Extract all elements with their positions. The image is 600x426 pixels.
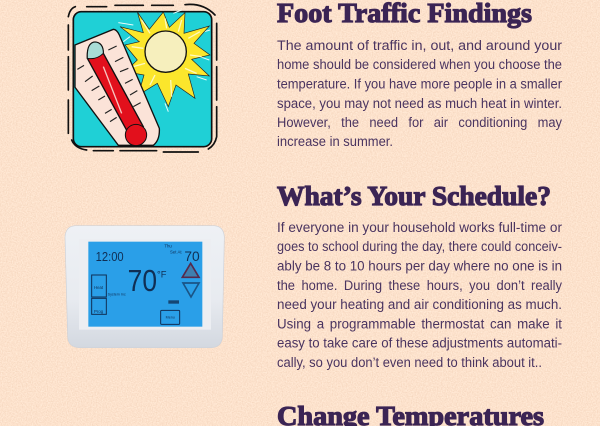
thermostat screen: Prog <box>94 309 104 314</box>
text block: schedule: If everyone in your household works full-time or <box>277 220 562 235</box>
text block: foot traffic: space, you may not need as much heat in winter. <box>277 96 562 111</box>
thermostat screen: Heat <box>94 285 104 290</box>
text block: schedule: goes to school during the day, there could conceiv- <box>277 239 562 254</box>
text block: schedule: ably be 8 to 10 hours per day where no one is in <box>277 258 562 274</box>
icon: programmable thermostat <box>65 226 224 348</box>
thermostat screen: 12:00 <box>96 249 124 264</box>
text block: schedule: the home. During these hours, you don’t really <box>277 278 562 293</box>
thermostat screen: System Inc <box>108 293 126 297</box>
text block: foot traffic: increase in summer. <box>277 134 393 149</box>
thermostat screen: 70 <box>184 248 200 264</box>
text block: foot traffic: However, the need for air conditioning may <box>277 115 562 130</box>
icon: thermometer and sun <box>68 4 217 152</box>
thermostat screen: Menu <box>166 315 175 319</box>
text block: schedule: need your heating and air conditioning as much. <box>277 297 562 312</box>
thermostat screen: Thu <box>164 244 172 249</box>
text block: schedule: Using a programmable thermostat can make it <box>277 316 562 332</box>
text block: foot traffic <box>277 38 563 149</box>
thermostat screen: °F <box>157 270 167 280</box>
text block: foot traffic: temperature. If you have more people in a smaller <box>277 76 562 92</box>
text block: foot traffic: home should be considered when you choose the <box>277 57 562 72</box>
text block: schedule <box>277 220 562 370</box>
heading: What's Your Schedule?: What’s Your Schedule? <box>277 180 551 211</box>
text block: schedule: easy to take care of these adjustments automati- <box>277 336 562 350</box>
text block: foot traffic: The amount of traffic in, out, and around your <box>277 38 563 53</box>
text block: schedule: cally, so you don’t even need to think about it.. <box>277 355 542 370</box>
thermostat screen: Set At <box>170 250 182 255</box>
thermostat screen <box>88 242 202 327</box>
thermostat screen: 70 <box>128 264 157 298</box>
